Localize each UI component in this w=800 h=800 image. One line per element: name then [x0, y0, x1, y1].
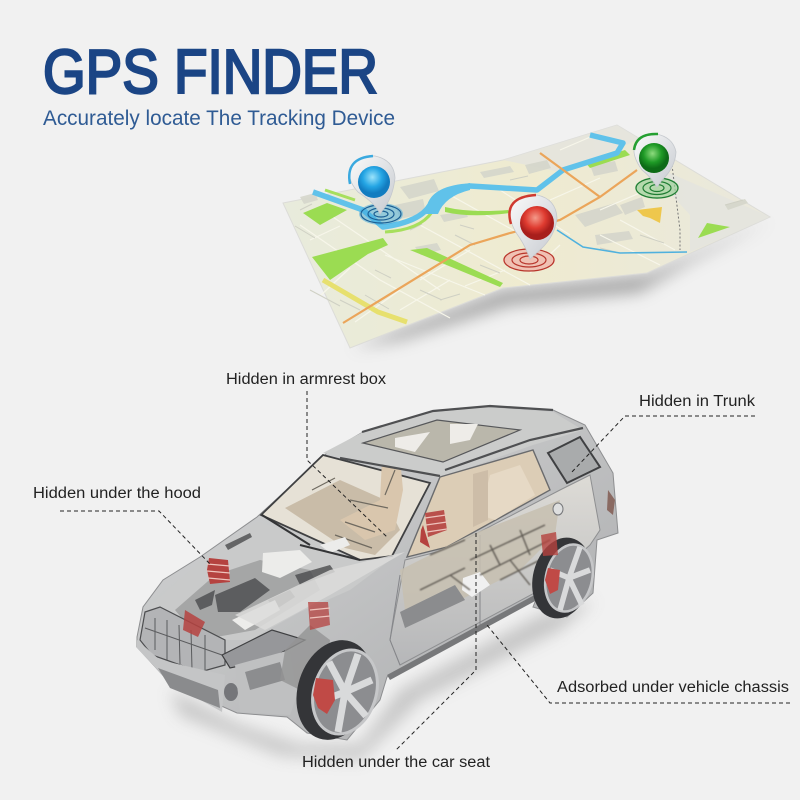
transmission cutaway	[400, 500, 560, 615]
callout: hood	[33, 485, 210, 564]
front tyre	[284, 630, 386, 750]
title: GPS FINDER	[43, 38, 378, 107]
front corner panel	[235, 650, 297, 715]
tail light	[607, 490, 615, 515]
yellow building	[637, 207, 662, 223]
map fold shading	[503, 125, 770, 252]
rear brake caliper	[545, 568, 560, 594]
blue pin	[349, 156, 403, 225]
callout: car seat: Hidden under the car seat	[302, 754, 491, 771]
wiper	[262, 515, 360, 560]
front rim spokes	[319, 654, 372, 732]
car cutaway illustration	[137, 406, 618, 760]
callout: vehicle chassis	[487, 625, 790, 703]
front grille	[140, 607, 225, 672]
callout: vehicle chassis: Adsorbed under vehicle chassis	[557, 679, 789, 696]
dashboard and interior	[285, 480, 400, 555]
engine bay	[175, 560, 320, 640]
sunroof glass highlight	[395, 424, 478, 452]
river	[313, 135, 623, 227]
map streets	[300, 135, 675, 322]
under-floor panel	[400, 585, 465, 628]
rear rim	[538, 539, 600, 617]
green parks	[303, 150, 730, 287]
side window	[407, 450, 550, 557]
thin stream	[557, 230, 687, 253]
door handle	[553, 503, 563, 515]
dotted route	[672, 165, 680, 250]
lower intake	[158, 668, 220, 708]
headlight	[222, 630, 305, 668]
door sill	[387, 592, 540, 680]
corner panel mechanical parts	[245, 662, 285, 690]
sunroof	[363, 420, 520, 462]
grille bars	[145, 618, 222, 671]
drivetrain details	[420, 525, 550, 590]
hood	[150, 522, 390, 640]
door shut lines	[390, 535, 480, 665]
engine dark parts	[195, 533, 335, 612]
callout: car seat	[302, 533, 491, 771]
red coil springs	[183, 510, 558, 637]
ground shadow	[170, 600, 595, 760]
rear tyre	[524, 531, 600, 625]
front brake caliper	[313, 678, 335, 714]
roof rails	[340, 406, 583, 476]
map illustration	[283, 125, 772, 348]
interior details	[312, 470, 395, 548]
car body	[137, 407, 618, 740]
spring coil lines	[207, 515, 447, 618]
fog lamp	[224, 683, 238, 701]
front suspension	[280, 625, 330, 690]
callout: armrest box	[226, 371, 387, 537]
door pillar	[473, 470, 488, 527]
green strip along river	[325, 190, 442, 232]
map shadow	[352, 220, 772, 348]
map block areas	[300, 160, 748, 255]
rear rim spokes	[550, 547, 590, 610]
callout: hood: Hidden under the hood	[33, 485, 201, 502]
callout: trunk: Hidden in Trunk	[639, 393, 755, 410]
front bumper	[137, 640, 225, 712]
green pin	[634, 134, 679, 199]
red pin	[503, 195, 557, 271]
white tank	[462, 572, 490, 597]
rear seat	[480, 465, 535, 520]
callout: armrest box: Hidden in armrest box	[226, 371, 386, 388]
rear quarter window	[548, 437, 600, 483]
front seat	[340, 458, 403, 540]
door panels	[390, 475, 600, 665]
map small details	[295, 176, 743, 310]
river widening	[426, 183, 470, 214]
yellow road	[323, 280, 407, 322]
engine light parts	[232, 537, 350, 630]
windshield	[261, 455, 430, 560]
map sheet	[283, 125, 770, 348]
subtitle: Accurately locate The Tracking Device	[43, 107, 395, 130]
front rim	[302, 642, 388, 742]
front structural beam	[235, 552, 405, 630]
roof	[323, 407, 583, 478]
callout: trunk	[570, 393, 755, 474]
orange roads	[343, 153, 637, 323]
